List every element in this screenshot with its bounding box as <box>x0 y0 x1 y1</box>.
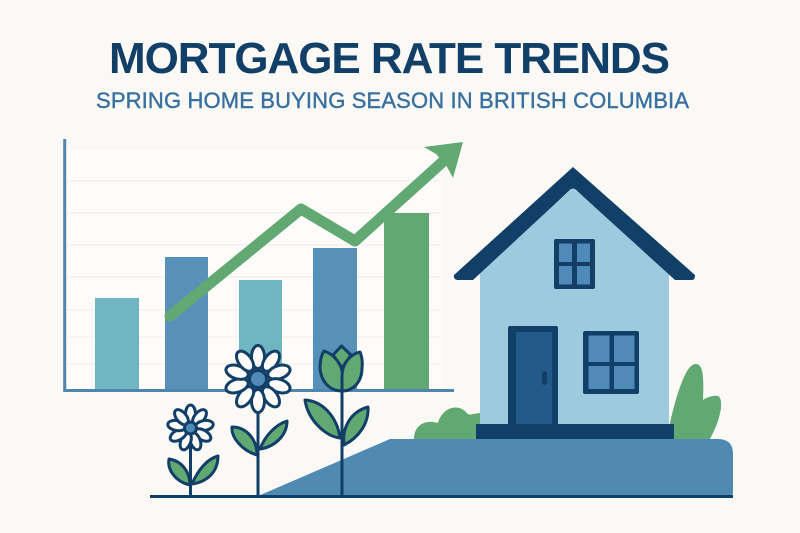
door <box>508 326 558 425</box>
left bush <box>414 408 482 439</box>
ground hill <box>258 439 733 496</box>
bar 5 <box>384 213 429 390</box>
subtitle: SPRING HOME BUYING SEASON IN BRITISH COLUMBIA <box>96 88 689 113</box>
bar 3 <box>239 280 282 390</box>
axes <box>65 139 454 390</box>
bar 1 <box>95 298 139 390</box>
front step <box>476 424 674 439</box>
lower window <box>583 331 639 394</box>
upper window <box>554 239 595 289</box>
tulip <box>305 346 368 496</box>
roof <box>454 167 695 280</box>
medium flower <box>224 346 292 496</box>
trend arrow <box>170 142 463 316</box>
bar chart <box>65 139 454 390</box>
bar 4 <box>313 248 357 390</box>
right bush <box>669 364 721 439</box>
bar 2 <box>165 257 208 390</box>
house <box>454 167 695 439</box>
house walls <box>480 188 669 425</box>
small flower <box>167 405 218 496</box>
title: MORTGAGE RATE TRENDS <box>109 34 670 83</box>
ground line <box>150 495 733 498</box>
